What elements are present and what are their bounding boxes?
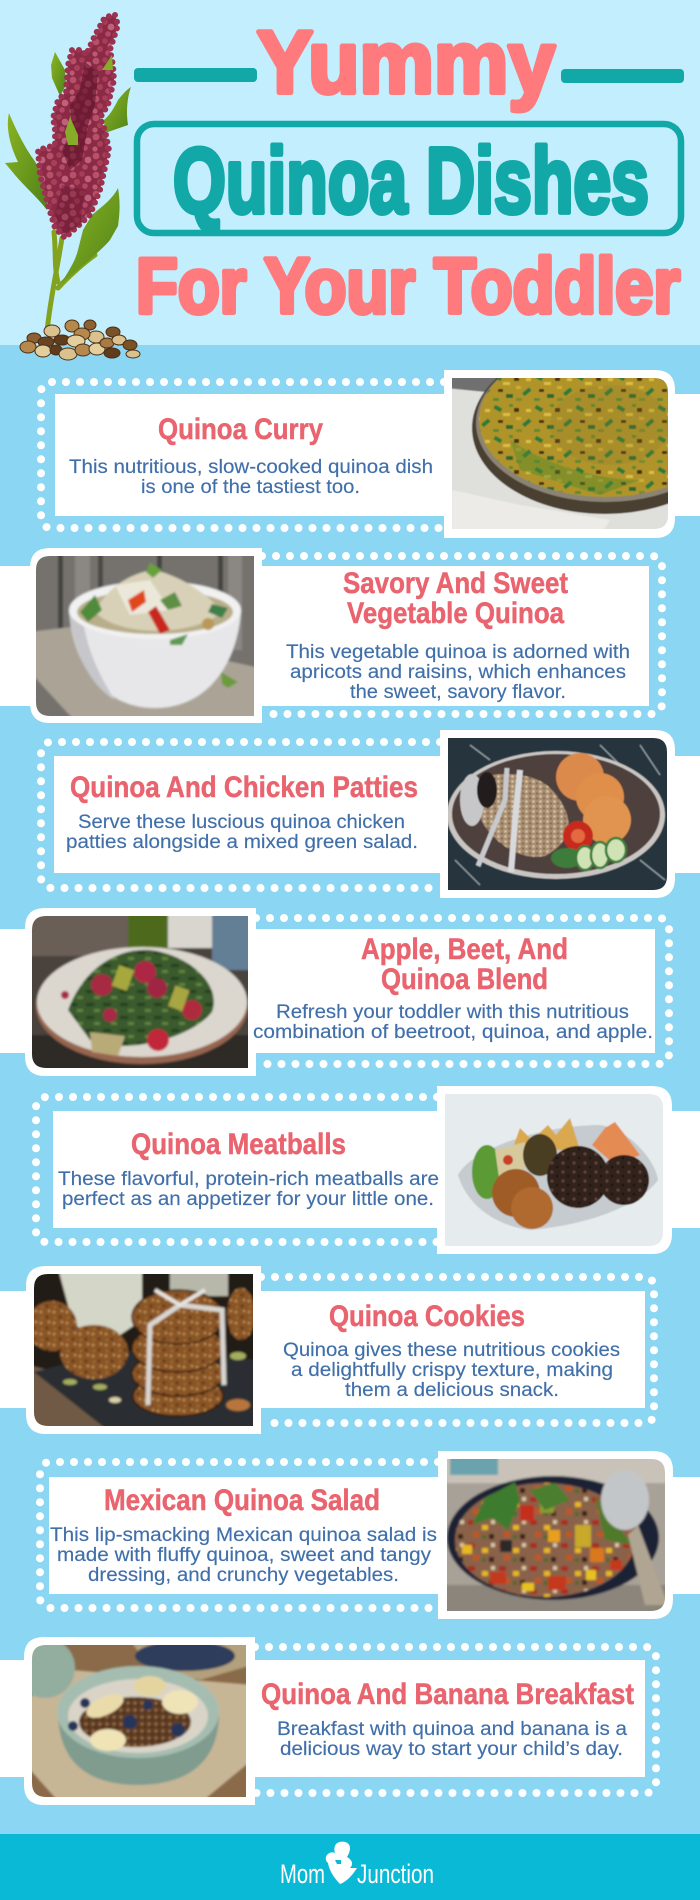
white text panel (0, 1291, 645, 1408)
leaf: on panicle centre (65, 117, 78, 145)
description: Breakfast with quinoa and banana is a (277, 1719, 627, 1740)
description: the sweet, savory flavor. (350, 682, 566, 703)
card 4: Apple, Beet, And Quinoa Blend (0, 908, 669, 1076)
footer bar (0, 1834, 700, 1900)
description: made with fluffy quinoa, sweet and tangy (57, 1545, 432, 1566)
heading: Quinoa Meatballs (131, 1128, 346, 1161)
description: Serve these luscious quinoa chicken (78, 812, 405, 833)
description (283, 1340, 620, 1401)
logo: MomJunction (280, 1842, 434, 1889)
photo: quinoa banana bowl (32, 1645, 246, 1797)
image frame (24, 1637, 255, 1805)
description (50, 1525, 437, 1586)
heading: Apple, Beet, And (361, 933, 568, 966)
heading: Vegetable Quinoa (347, 597, 564, 630)
description: delicious way to start your child’s day. (280, 1739, 623, 1760)
photo: cookies stack (34, 1274, 253, 1426)
image frame (444, 370, 675, 538)
card 2: Savory And Sweet Vegetable Quinoa (0, 548, 662, 723)
card 6: Quinoa Cookies (0, 1266, 654, 1434)
heading: Savory And Sweet (343, 567, 568, 600)
description (277, 1719, 627, 1760)
white text panel (0, 929, 655, 1053)
description: is one of the tastiest too. (141, 477, 360, 498)
title frame (137, 124, 681, 233)
card 1: Quinoa Curry (37, 370, 700, 538)
logo icon: mother and child (326, 1842, 357, 1884)
image frame (26, 1266, 261, 1434)
leaf: lower right (60, 188, 120, 285)
description: them a delicious snack. (345, 1380, 559, 1401)
description (58, 1169, 439, 1210)
card 8: Quinoa And Banana Breakfast (0, 1637, 656, 1805)
logo word: Junction: Junction (357, 1859, 434, 1889)
description: Quinoa gives these nutritious cookies (283, 1340, 620, 1361)
heading: Mexican Quinoa Salad (104, 1484, 380, 1517)
stem (47, 232, 95, 332)
dotted border (36, 1097, 437, 1242)
description (69, 457, 433, 498)
image frame (30, 548, 262, 723)
photo: chicken patties plate (448, 738, 667, 890)
photo: meatballs plate (440, 1090, 666, 1250)
photo: vegetable quinoa bowl (36, 556, 254, 716)
leaf: lower left (5, 113, 47, 210)
left title rule (134, 68, 257, 82)
leaf: on panicle top (102, 55, 113, 70)
heading: Quinoa Blend (381, 963, 548, 996)
heading: Quinoa And Banana Breakfast (261, 1678, 634, 1711)
logo word: Mom: Mom (280, 1859, 325, 1889)
description: This vegetable quinoa is adorned with (286, 642, 630, 663)
white text panel (55, 394, 700, 516)
header background (0, 0, 700, 345)
heading (343, 567, 568, 630)
description: perfect as an appetizer for your little one. (62, 1189, 434, 1210)
main blue background (0, 345, 700, 1834)
description: This lip-smacking Mexican quinoa salad is (50, 1525, 437, 1546)
description (253, 1002, 653, 1043)
dotted border (41, 382, 444, 528)
description: This nutritious, slow-cooked quinoa dish (69, 457, 433, 478)
description: Refresh your toddler with this nutritious (276, 1002, 629, 1023)
illustration: quinoa plant (5, 15, 140, 360)
image frame (440, 730, 675, 898)
description: These flavorful, protein-rich meatballs are (58, 1169, 439, 1190)
description (286, 642, 630, 703)
dotted border (255, 1647, 656, 1793)
image frame (438, 1451, 673, 1619)
panicle (38, 15, 118, 238)
description: combination of beetroot, quinoa, and apple. (253, 1022, 653, 1043)
heading: Quinoa Curry (158, 413, 323, 446)
white text panel (0, 1660, 645, 1777)
photo: Mexican salad plate (447, 1459, 665, 1611)
card 3: Quinoa And Chicken Patties (41, 730, 700, 898)
dotted border (261, 1277, 654, 1423)
heading: Quinoa Cookies (329, 1300, 525, 1333)
photo: beet salad plate (32, 916, 248, 1068)
description: a delightfully crispy texture, making (291, 1360, 613, 1381)
white text panel (53, 1111, 700, 1228)
white text panel (0, 566, 649, 706)
title block (134, 12, 684, 330)
dotted border (41, 742, 440, 888)
description: patties alongside a mixed green salad. (66, 832, 418, 853)
description: dressing, and crunchy vegetables. (88, 1565, 399, 1586)
heading: Quinoa And Chicken Patties (70, 771, 418, 804)
photo: quinoa curry pan (452, 378, 668, 529)
description (66, 812, 418, 853)
dotted border (40, 1462, 438, 1608)
image frame (25, 908, 256, 1076)
seed pile (20, 320, 140, 360)
white text panel (49, 1477, 700, 1594)
dotted border (262, 556, 662, 714)
leaf: upper small (51, 52, 66, 96)
description: apricots and raisins, which enhances (290, 662, 626, 683)
right title rule (561, 69, 684, 83)
leaf: upper right (104, 87, 131, 133)
title line: Yummy: Yummy (257, 12, 555, 112)
heading (361, 933, 568, 996)
card 7: Mexican Quinoa Salad (40, 1451, 700, 1619)
image frame (437, 1086, 672, 1254)
card 5: Quinoa Meatballs (36, 1086, 700, 1254)
white text panel (54, 756, 700, 873)
dotted border (256, 918, 669, 1064)
